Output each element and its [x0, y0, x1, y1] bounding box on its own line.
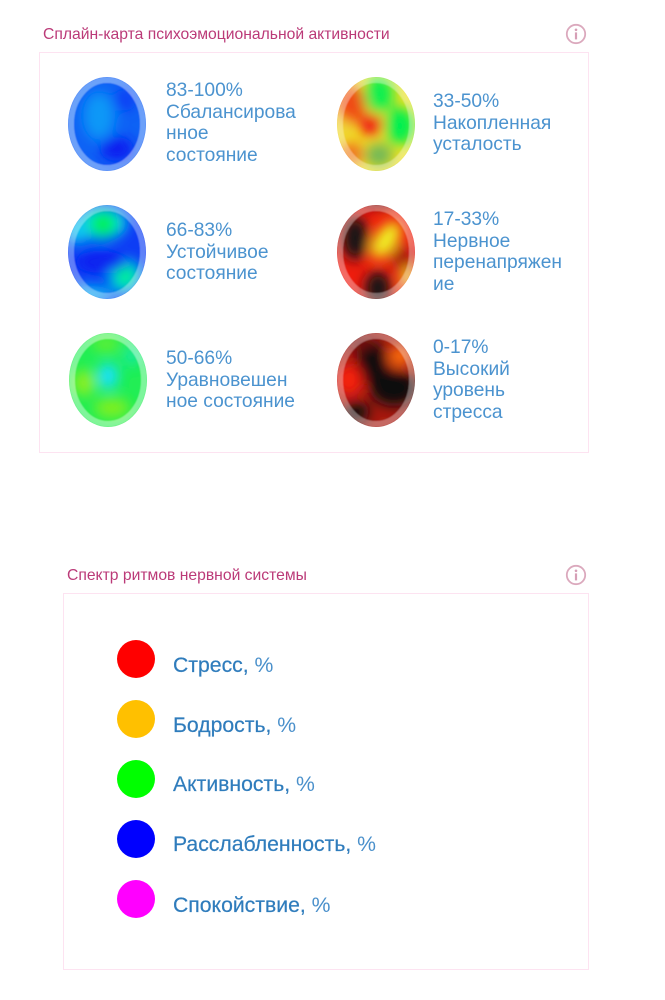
text: 17-33: ие — [433, 274, 454, 295]
text: 17-33: перенапряжен — [433, 252, 562, 273]
icon: black red oval 0-17 — [337, 333, 415, 427]
text: 0-17: 0-17% — [433, 337, 488, 358]
title: rhythm spectrum: Спектр ритмов нервной системы — [67, 567, 307, 584]
text: 0-17: стресса — [433, 402, 503, 423]
legend dot: vigor — [117, 700, 155, 738]
text: 50-66: ное состояние — [166, 391, 295, 412]
legend label: vigor: Бодрость, % — [173, 714, 296, 737]
text: 66-83: состояние — [166, 263, 258, 284]
text: 50-66 — [166, 348, 295, 412]
legend dot: activity — [117, 760, 155, 798]
text: 17-33: 17-33% — [433, 209, 499, 230]
text: 17-33: Нервное — [433, 231, 510, 252]
legend dot: calm — [117, 880, 155, 918]
legend dot: relaxation — [117, 820, 155, 858]
text: 66-83: Устойчивое — [166, 242, 268, 263]
legend label: relaxation: Расслабленность, % — [173, 833, 376, 856]
legend label: stress: Стресс, % — [173, 654, 273, 677]
legend label: calm: Спокойствие, % — [173, 894, 330, 917]
icon: blue green oval 66-83 — [68, 205, 146, 299]
text: 50-66: Уравновешен — [166, 370, 287, 391]
text: 33-50: Накопленная — [433, 113, 551, 134]
text: 0-17: уровень — [433, 380, 505, 401]
text: 0-17 — [433, 337, 510, 423]
text: 33-50: усталость — [433, 134, 522, 155]
text: 83-100: Сбалансирова — [166, 102, 296, 123]
legend label: activity: Активность, % — [173, 773, 315, 796]
icon: yellow red oval 33-50 — [337, 77, 415, 171]
panel: rhythm spectrum — [63, 593, 589, 970]
text: 33-50: 33-50% — [433, 91, 499, 112]
text: 83-100: нное — [166, 123, 209, 144]
text: 17-33 — [433, 209, 562, 295]
text: 50-66: 50-66% — [166, 348, 232, 369]
legend dot: stress — [117, 640, 155, 678]
icon: info spline map — [566, 24, 586, 44]
text: 66-83: 66-83% — [166, 220, 232, 241]
text: 83-100: состояние — [166, 145, 258, 166]
text: 33-50 — [433, 91, 551, 155]
text: 66-83 — [166, 220, 268, 284]
text: 83-100 — [166, 80, 296, 166]
icon: blue oval 83-100 — [68, 77, 146, 171]
text: 83-100: 83-100% — [166, 80, 243, 101]
panel: spline map — [39, 52, 589, 453]
icon: green oval 50-66 — [69, 333, 147, 427]
icon: red dark oval 17-33 — [337, 205, 415, 299]
text: 0-17: Высокий — [433, 359, 510, 380]
title: spline map: Сплайн-карта психоэмоциональной активности — [43, 26, 390, 43]
icon: info rhythm spectrum — [566, 564, 586, 586]
